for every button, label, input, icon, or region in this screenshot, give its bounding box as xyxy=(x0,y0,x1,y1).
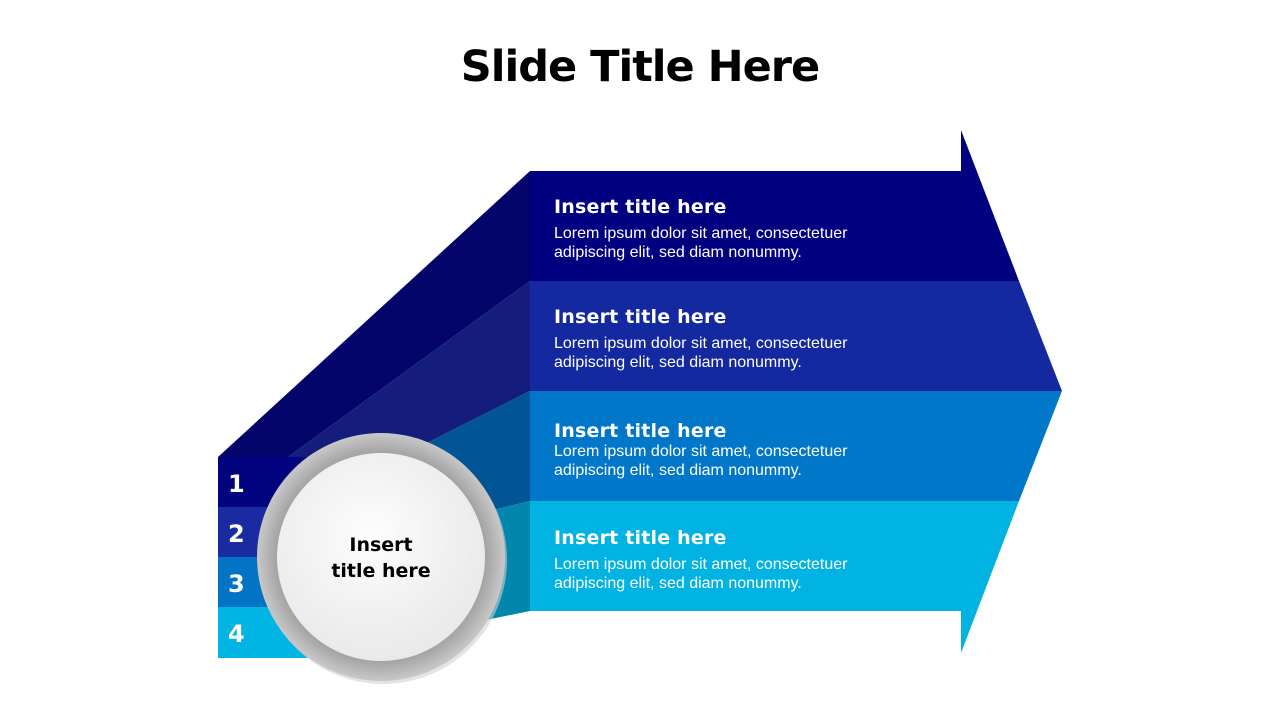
number boxes xyxy=(218,457,308,658)
text 3 xyxy=(554,420,848,479)
side faces xyxy=(218,171,530,658)
center circle: Insert xyxy=(349,534,413,556)
text 1 xyxy=(554,196,848,261)
number boxes: 3 xyxy=(228,570,245,598)
text 4: Insert title here xyxy=(554,527,727,549)
number boxes: 1 xyxy=(228,470,245,498)
text 4: Lorem ipsum dolor sit amet, consectetuer xyxy=(554,556,847,573)
band 1 xyxy=(530,130,1019,281)
text 1: Insert title here xyxy=(554,196,727,218)
text 2: adipiscing elit, sed diam nonummy. xyxy=(554,354,802,371)
text 2: Insert title here xyxy=(554,306,727,328)
band 2 xyxy=(530,281,1062,391)
text 1: adipiscing elit, sed diam nonummy. xyxy=(554,244,802,261)
title: Slide Title Here xyxy=(461,42,819,92)
text 2 xyxy=(554,306,848,371)
text 3: Lorem ipsum dolor sit amet, consectetuer xyxy=(554,443,847,460)
text 3: Insert title here xyxy=(554,420,727,442)
text 4: adipiscing elit, sed diam nonummy. xyxy=(554,575,802,592)
band 4 xyxy=(530,501,1019,653)
text 1: Lorem ipsum dolor sit amet, consectetuer xyxy=(554,225,847,242)
center circle xyxy=(257,433,507,684)
text 4 xyxy=(554,527,848,592)
text 3: adipiscing elit, sed diam nonummy. xyxy=(554,462,802,479)
band 3 xyxy=(530,391,1062,501)
center circle: title here xyxy=(331,560,431,582)
number boxes: 2 xyxy=(228,520,245,548)
text 2: Lorem ipsum dolor sit amet, consectetuer xyxy=(554,335,847,352)
number boxes: 4 xyxy=(228,620,245,648)
